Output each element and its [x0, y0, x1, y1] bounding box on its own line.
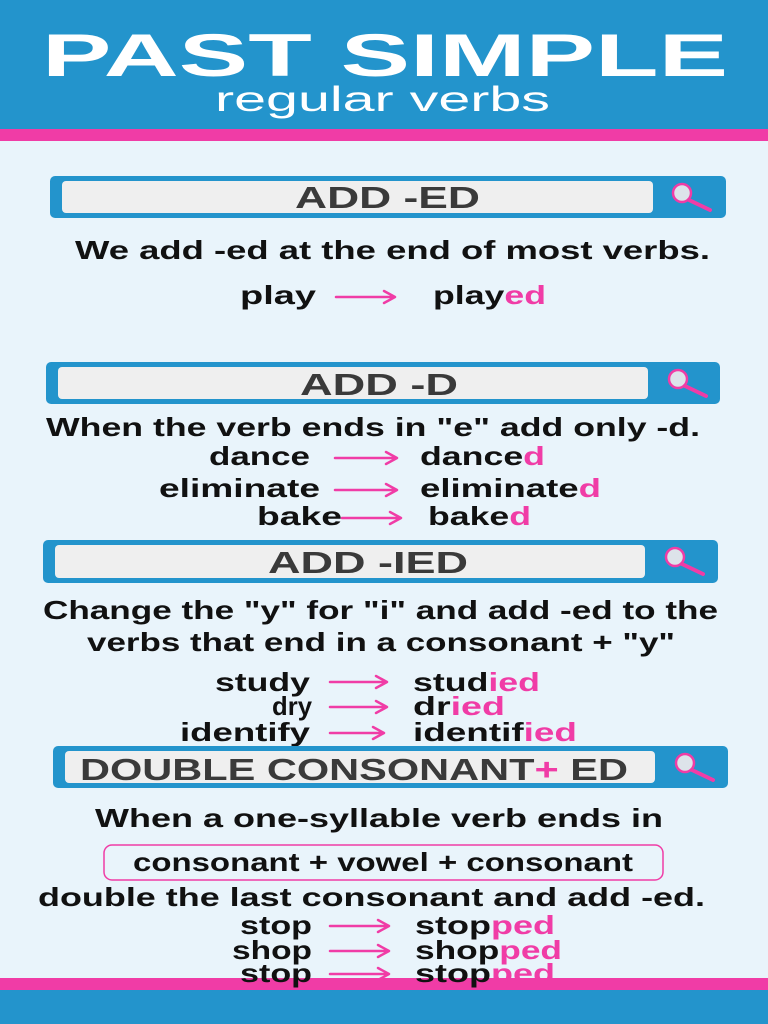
examples: double: shop ped [415, 935, 562, 965]
examples: d: eliminate [159, 473, 320, 503]
text: rule d: When the verb ends in "e" add only -d. [46, 412, 700, 442]
text: rule double: When a one-syllable verb ends in [95, 803, 663, 833]
example: stop overlapping footer [240, 958, 555, 988]
example: play: play [240, 280, 317, 310]
examples: d: eliminate d [420, 473, 601, 503]
text: rule ed: We add -ed at the end of most verbs. [75, 235, 710, 265]
icon: magnifier [673, 184, 710, 210]
section bar: DOUBLE CONSONANT + ED [53, 746, 728, 788]
examples: double: stop ped [415, 910, 555, 940]
footer band [0, 978, 768, 1024]
icon: magnifier [669, 370, 706, 396]
text: rule ied: verbs that end in a consonant + "y" [87, 627, 675, 657]
examples: ied: identif ied [413, 717, 577, 747]
examples: d: dance d [420, 441, 545, 471]
text: rule ied [43, 595, 718, 657]
example: play [240, 280, 546, 310]
section bar: ADD -IED: ADD -IED [268, 545, 468, 580]
examples: double: shop [232, 935, 312, 965]
section bar: ADD -D: ADD -D [300, 367, 458, 402]
examples: ied [180, 667, 577, 747]
section bar: ADD -ED [50, 176, 726, 218]
examples: ied: dry [272, 691, 313, 721]
text: rule double cont: double the last consonant and add -ed. [38, 882, 705, 912]
examples: d [159, 441, 601, 531]
section bar: ADD -IED [43, 540, 718, 583]
callout: pattern box [104, 845, 663, 880]
examples: d: bake d [428, 501, 531, 531]
section bar: DOUBLE CONSONANT + ED: DOUBLE CONSONANT + ED [80, 752, 628, 787]
examples: double [232, 910, 562, 965]
header banner [0, 0, 768, 141]
example: stop overlapping footer: stop [240, 958, 312, 988]
examples: d: dance [209, 441, 310, 471]
callout: pattern box: consonant + vowel + consonant [133, 847, 633, 877]
example: play: play ed [433, 280, 546, 310]
examples: ied: identify [180, 717, 311, 747]
text: rule ied: Change the "y" for "i" and add -ed to the [43, 595, 718, 625]
icon: magnifier [676, 754, 713, 780]
example: stop overlapping footer: stop ped [415, 958, 555, 988]
examples: d: bake [257, 501, 342, 531]
examples: ied: study [215, 667, 311, 697]
subtitle: regular verbs [215, 80, 550, 119]
examples: ied: dr ied [413, 691, 505, 721]
title: PAST SIMPLE [42, 22, 728, 89]
section bar: ADD -D [46, 362, 720, 404]
icon: magnifier [666, 548, 703, 574]
section bar: ADD -ED: ADD -ED [295, 180, 480, 215]
examples: ied: stud ied [413, 667, 540, 697]
examples: double: stop [240, 910, 312, 940]
